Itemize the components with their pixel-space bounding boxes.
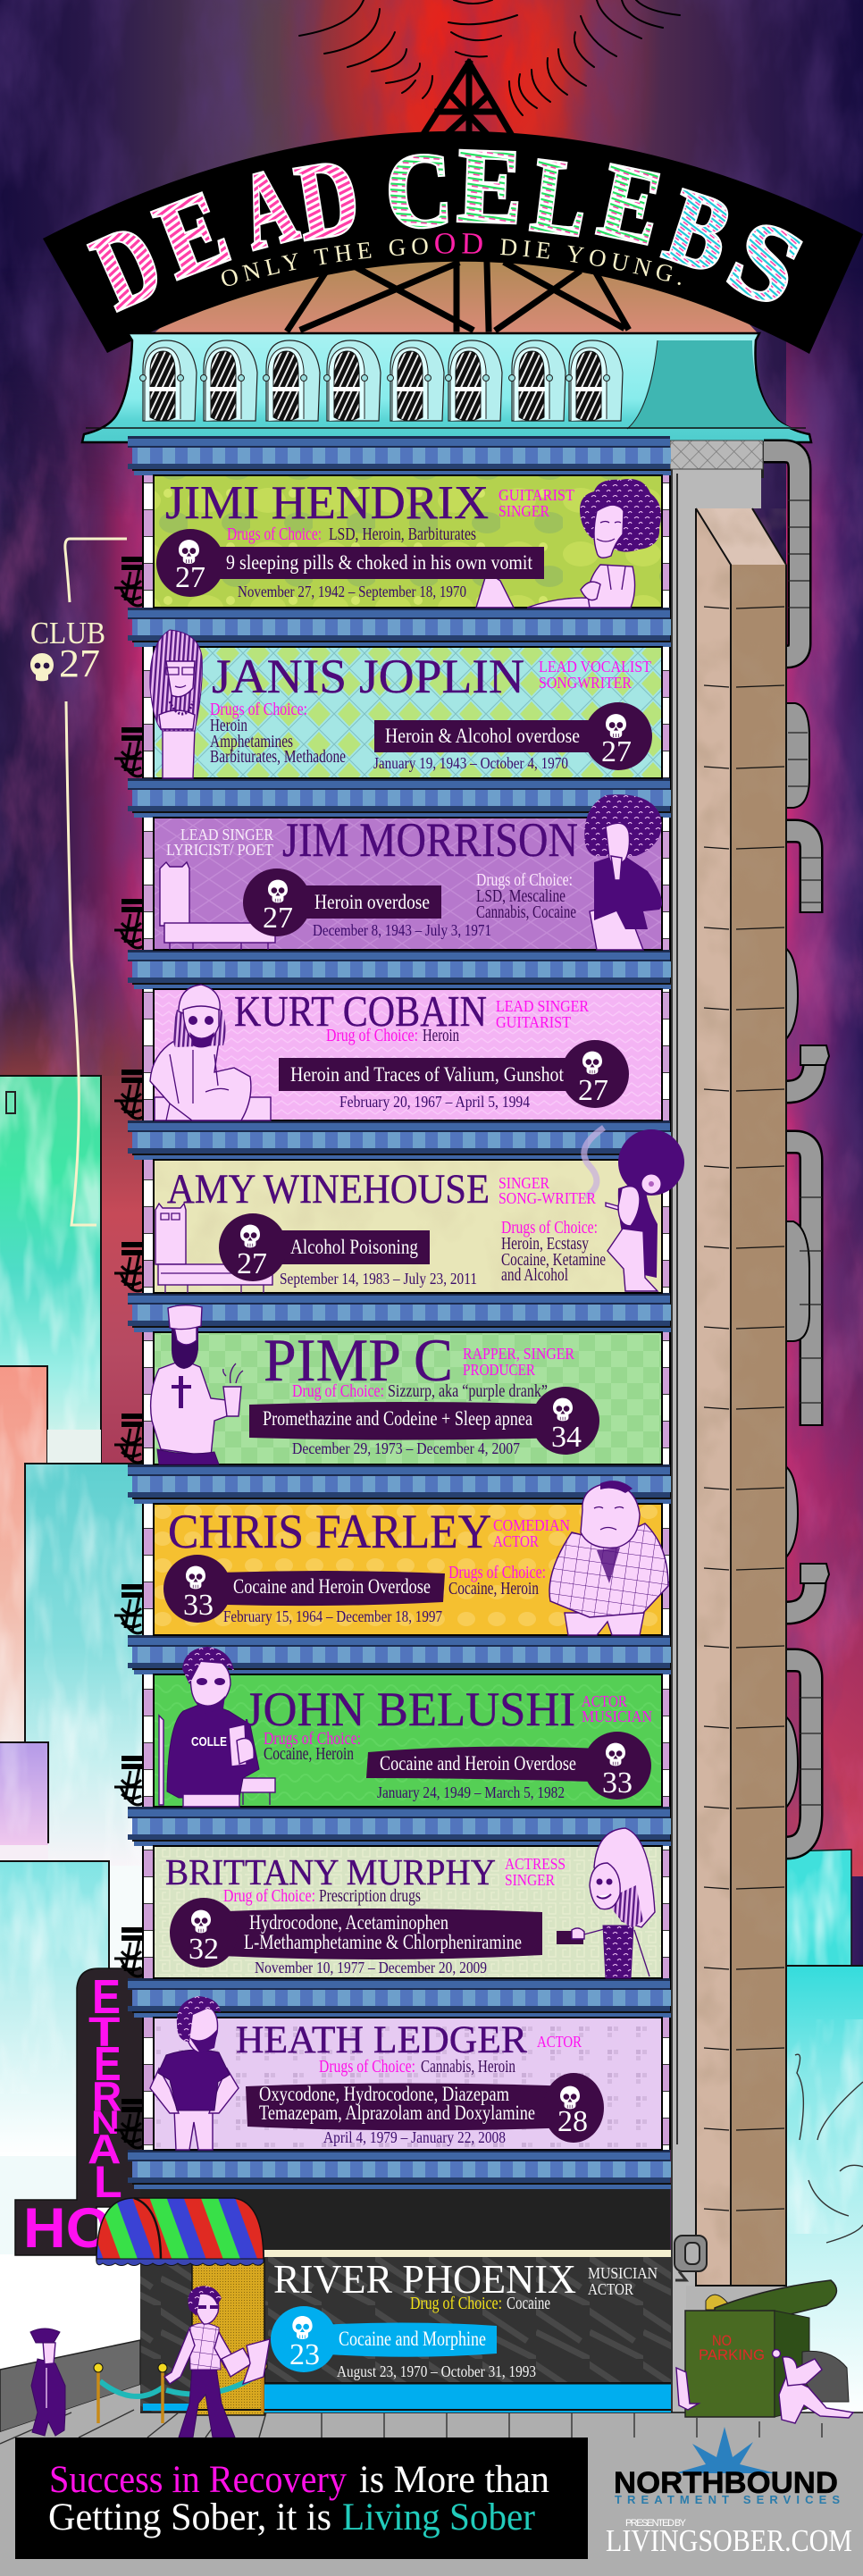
sign: dead celebs <box>43 126 863 354</box>
occupation <box>496 997 589 1031</box>
dates: August 23, 1970 – October 31, 1993 <box>337 2362 536 2380</box>
line one <box>49 2459 549 2501</box>
drugs of choice <box>210 700 346 767</box>
drugs of choice: Drugs of Choice: <box>319 2057 415 2077</box>
occupation: SINGER <box>505 1871 555 1889</box>
occupation: LEAD SINGER <box>496 997 589 1015</box>
portrait: Heath Ledger <box>150 1996 239 2150</box>
awning <box>96 2198 264 2266</box>
sidewalk and footer ground <box>0 2385 863 2576</box>
portrait: Jim Morrison <box>584 794 662 950</box>
occupation <box>463 1345 574 1379</box>
dates: November 27, 1942 – September 18, 1970 <box>238 583 466 600</box>
drugs of choice: Drugs of Choice: <box>501 1218 598 1238</box>
occupation: GUITARIST <box>499 486 574 504</box>
drugs of choice: Drugs of Choice: <box>264 1729 361 1749</box>
club 27 callout <box>30 539 127 1225</box>
drugs of choice: Cocaine, Heroin <box>264 1744 354 1764</box>
figure: River Phoenix <box>164 2286 270 2438</box>
occupation <box>166 826 273 859</box>
cause of death badge <box>374 702 652 770</box>
cause of death badge: 33 <box>183 1589 214 1622</box>
occupation: SONG-WRITER <box>499 1189 596 1207</box>
cause of death badge: Hydrocodone, Acetaminophen <box>249 1911 448 1934</box>
name: PIMP C <box>264 1326 453 1394</box>
panel: Brittany Murphy <box>154 1828 662 1978</box>
cause of death badge <box>163 1555 445 1623</box>
occupation: SINGER <box>499 1174 549 1192</box>
hotel neon sign: R <box>92 2073 121 2119</box>
cause of death badge: 32 <box>189 1933 219 1966</box>
occupation: ACTRESS <box>505 1855 566 1873</box>
panel: Heath Ledger <box>150 1996 662 2150</box>
portrait: Amy Winehouse <box>584 1128 684 1291</box>
door <box>192 2259 264 2415</box>
panel: Janis Joplin <box>150 630 662 778</box>
cause of death badge: Heroin and Traces of Valium, Gunshot <box>290 1063 565 1086</box>
bed <box>160 862 275 950</box>
title: DEAD CELEBS: B <box>653 166 744 296</box>
drugs of choice <box>319 2057 515 2077</box>
hotel neon sign: A <box>88 2127 121 2172</box>
occupation <box>505 1855 566 1889</box>
dumpster <box>685 2280 836 2417</box>
portrait: Janis Joplin <box>150 630 202 778</box>
cause of death badge: 23 <box>289 2338 320 2371</box>
occupation: COMEDIAN <box>493 1516 570 1534</box>
drug of choice: Drug of Choice: <box>292 1381 384 1401</box>
occupation: SONGWRITER <box>539 674 632 692</box>
occupation: GUITARIST <box>496 1013 571 1031</box>
title: DEAD CELEBS: C <box>383 130 455 252</box>
rope barrier <box>94 2362 267 2423</box>
panel: Jim Morrison <box>154 794 662 950</box>
cause of death badge: 27 <box>237 1247 267 1280</box>
logo: LivingSober.com: PRESENTED BY <box>625 2518 687 2529</box>
dates: January 24, 1949 – March 5, 1982 <box>377 1783 565 1801</box>
drugs of choice: Drugs of Choice: <box>448 1563 546 1582</box>
drain fixture <box>674 2236 707 2280</box>
dates: January 19, 1943 – October 4, 1970 <box>373 754 568 772</box>
cause of death badge <box>243 868 441 936</box>
hotel neon sign: N <box>91 2103 120 2141</box>
drug of choice: Heroin <box>423 1026 459 1045</box>
drug of choice: Prescription drugs <box>319 1886 421 1906</box>
floor cornices <box>128 436 671 2189</box>
panel: River Phoenix <box>143 2256 671 2415</box>
occupation: PRODUCER <box>463 1361 535 1379</box>
fire escapes <box>114 559 143 2148</box>
drugs of choice: Amphetamines <box>210 732 293 751</box>
portrait: Pimp C <box>151 1305 243 1464</box>
title: DEAD CELEBS <box>77 126 821 332</box>
name: RIVER PHOENIX <box>273 2256 576 2302</box>
occupation: LYRICIST/ POET <box>166 841 273 859</box>
antenna tower <box>152 63 759 335</box>
occupation: RAPPER, SINGER <box>463 1345 574 1363</box>
occupation: ACTOR <box>493 1532 539 1550</box>
no parking label: NO <box>712 2332 732 2349</box>
cause of death badge <box>219 1213 430 1281</box>
cause of death badge: 27 <box>601 735 632 768</box>
portrait: Brittany Murphy <box>557 1828 655 1978</box>
name: CHRIS FARLEY <box>168 1505 491 1558</box>
pipes <box>764 451 829 1848</box>
drugs of choice: Heroin, Ecstasy <box>501 1234 589 1254</box>
drug of choice: Drug of Choice: <box>223 1886 315 1906</box>
cause of death badge <box>271 2306 497 2372</box>
drugs of choice: Drugs of Choice: <box>210 700 307 719</box>
dates: December 29, 1973 – December 4, 2007 <box>292 1439 520 1457</box>
name: BRITTANY MURPHY <box>165 1851 496 1892</box>
occupation <box>493 1516 570 1550</box>
cause of death badge: 34 <box>551 1421 582 1454</box>
logo: Northbound: TREATMENT SERVICES <box>615 2493 840 2506</box>
cause of death badge <box>170 1898 542 1968</box>
portrait: Jimi Hendrix <box>476 479 661 608</box>
dates: November 10, 1977 – December 20, 2009 <box>255 1959 487 1976</box>
panel: John Belushi <box>154 1647 662 1807</box>
occupation: ACTOR <box>582 1692 627 1710</box>
logo: Northbound: NORTHBOUND <box>614 2466 838 2500</box>
cause of death badge <box>246 2073 604 2143</box>
cause of death badge: Heroin overdose <box>314 891 430 913</box>
portrait: Chris Farley <box>549 1481 668 1635</box>
occupation <box>499 1174 596 1207</box>
line one: is More than <box>359 2459 549 2501</box>
occupation: ACTOR <box>537 2033 582 2051</box>
left skyline buildings <box>0 1076 145 2370</box>
drug of choice: Cocaine <box>507 2294 550 2313</box>
occupation <box>539 658 651 692</box>
dates: February 15, 1964 – December 18, 1997 <box>223 1607 442 1625</box>
hotel neon sign: T <box>88 2010 120 2056</box>
club 27 callout: CLUB <box>30 616 105 650</box>
name: AMY WINEHOUSE <box>167 1166 490 1212</box>
cause of death badge: L-Methamphetamine & Chlorpheniramine <box>244 1931 522 1953</box>
drugs of choice: Cocaine, Heroin <box>448 1579 539 1598</box>
drugs of choice <box>448 1563 546 1598</box>
cause of death badge: Cocaine and Heroin Overdose <box>233 1575 431 1598</box>
title: DEAD CELEBS: D <box>77 200 178 332</box>
drug of choice <box>223 1886 421 1906</box>
cause of death badge: 28 <box>557 2105 588 2138</box>
occupation <box>588 2264 658 2298</box>
cause of death badge: 27 <box>175 561 205 594</box>
cause of death badge: Cocaine and Heroin Overdose <box>380 1752 576 1775</box>
dates: April 4, 1979 – January 22, 2008 <box>323 2128 506 2146</box>
drugs of choice <box>501 1218 606 1285</box>
cause of death badge: Oxycodone, Hydrocodone, Diazepam <box>259 2083 509 2105</box>
bench <box>159 1716 275 1805</box>
portrait: Kurt Cobain <box>150 985 271 1120</box>
dates: February 20, 1967 – April 5, 1994 <box>339 1093 530 1111</box>
title: DEAD CELEBS: L <box>526 135 594 258</box>
brick column <box>696 508 786 2286</box>
drug of choice: Drug of Choice: <box>410 2294 502 2313</box>
logo: Northbound <box>614 2427 840 2506</box>
drugs of choice: Heroin <box>210 716 247 735</box>
title: DEAD CELEBS: D <box>289 137 366 264</box>
drugs of choice: and Alcohol <box>501 1265 568 1285</box>
drug of choice: Sizzurp, aka “purple drank” <box>388 1381 548 1401</box>
tower body <box>670 441 786 2417</box>
tagline: ONLY THE GOOD DIE YOUNG. <box>222 233 681 286</box>
occupation: ACTOR <box>588 2280 633 2298</box>
cause of death badge <box>156 529 544 597</box>
panel: Kurt Cobain <box>150 985 662 1120</box>
drugs of choice: LSD, Heroin, Barbiturates <box>329 524 476 544</box>
panel: Jimi Hendrix <box>154 475 662 608</box>
ground floor wall <box>140 2189 671 2414</box>
portrait: John Belushi: COLLE <box>191 1734 227 1749</box>
drugs of choice <box>264 1729 361 1764</box>
line two: Getting Sober, it is <box>48 2496 331 2538</box>
figure: doorman <box>30 2328 65 2436</box>
line two <box>48 2496 535 2538</box>
panel: Amy Winehouse <box>154 1128 684 1293</box>
club 27 callout: 27 <box>59 642 100 685</box>
portrait: John Belushi <box>167 1647 259 1807</box>
dates: December 8, 1943 – July 3, 1971 <box>313 921 491 939</box>
broadcast waves <box>299 0 680 115</box>
street wall <box>0 2340 140 2432</box>
cause of death badge: 9 sleeping pills & choked in his own vomit <box>226 551 533 574</box>
line two: Living Sober <box>342 2496 535 2538</box>
no parking label: PARKING <box>699 2346 765 2363</box>
line one: Success in Recovery <box>49 2459 347 2501</box>
drugs of choice: Barbiturates, Methadone <box>210 747 346 767</box>
title: DEAD CELEBS: S <box>712 194 821 330</box>
drugs of choice: LSD, Mescaline <box>476 886 566 906</box>
hotel neon sign: HO <box>23 2196 112 2260</box>
hotel neon sign: E <box>92 1969 121 2024</box>
occupation: SINGER <box>499 502 549 520</box>
occupation: MUSICIAN <box>582 1708 652 1725</box>
cause of death badge: 33 <box>602 1766 633 1800</box>
drug of choice: Drug of Choice: <box>326 1026 418 1045</box>
bed <box>155 1204 272 1293</box>
hotel neon sign: L <box>94 2157 122 2207</box>
occupation <box>499 486 574 520</box>
title: DEAD CELEBS: E <box>456 126 524 246</box>
panel: Pimp C <box>151 1305 662 1464</box>
arched windows <box>139 340 623 421</box>
drugs of choice: Cannabis, Cocaine <box>476 902 576 922</box>
name: JANIS JOPLIN <box>212 650 524 703</box>
cause of death badge <box>249 1387 599 1455</box>
cause of death badge: 27 <box>578 1074 608 1107</box>
footer slogan <box>15 2438 588 2559</box>
cause of death badge <box>279 1040 629 1108</box>
cause of death badge: Alcohol Poisoning <box>290 1236 418 1258</box>
hotel neon sign: E <box>94 2037 121 2091</box>
figure: homeless man and rat <box>676 2350 853 2423</box>
hotel neon sign <box>15 1968 143 2260</box>
name: KURT COBAIN <box>234 986 487 1036</box>
drugs of choice: Drugs of Choice: <box>476 870 573 890</box>
drug of choice <box>292 1381 548 1401</box>
cause of death badge: 27 <box>263 902 293 935</box>
name: JOHN BELUSHI <box>245 1682 575 1736</box>
cause of death badge <box>366 1732 651 1800</box>
occupation: MUSICIAN <box>588 2264 658 2282</box>
blue awning strip <box>143 2382 671 2412</box>
right skyline buildings <box>786 1850 863 2417</box>
name: JIM MORRISON <box>282 813 578 867</box>
occupation <box>582 1692 652 1725</box>
name: HEATH LEDGER <box>236 2019 527 2061</box>
title: DEAD CELEBS: E <box>142 167 243 301</box>
drugs of choice <box>227 524 476 544</box>
cause of death badge: Heroin & Alcohol overdose <box>385 725 580 747</box>
side window strips <box>142 475 671 2150</box>
name: JIMI HENDRIX <box>165 477 489 529</box>
occupation: LEAD VOCALIST <box>539 658 651 675</box>
panel: Chris Farley <box>154 1481 668 1635</box>
no parking label <box>699 2332 765 2363</box>
drugs of choice: Drugs of Choice: <box>227 524 322 544</box>
cause of death badge: Promethazine and Codeine + Sleep apnea <box>263 1407 532 1430</box>
title: DEAD CELEBS: E <box>591 140 672 267</box>
cause of death badge: Cocaine and Morphine <box>339 2328 486 2350</box>
drugs of choice: Cocaine, Ketamine <box>501 1250 606 1270</box>
title: DEAD CELEBS: A <box>228 143 307 273</box>
drugs of choice: Cannabis, Heroin <box>421 2057 515 2077</box>
rooftop cap <box>82 333 811 442</box>
drugs of choice <box>476 870 576 922</box>
occupation: LEAD SINGER <box>180 826 273 843</box>
cause of death badge: Temazepam, Alprazolam and Doxylamine <box>259 2102 535 2124</box>
dates: September 14, 1983 – July 23, 2011 <box>280 1270 477 1288</box>
